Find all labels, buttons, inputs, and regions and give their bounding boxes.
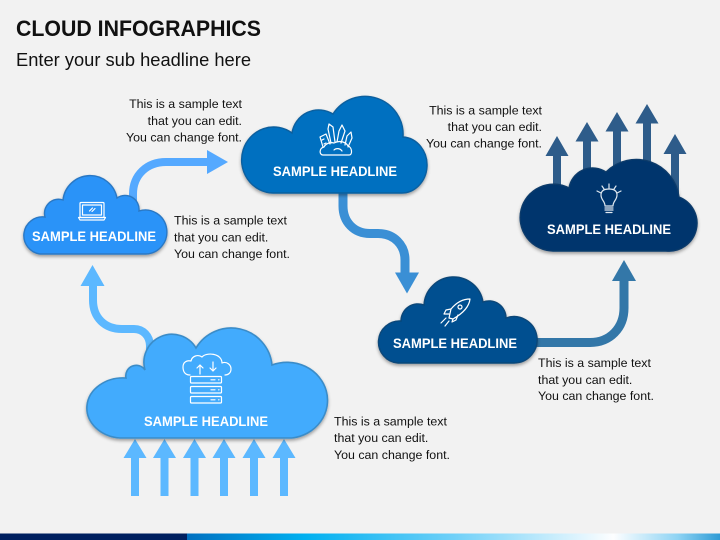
heading: SAMPLE HEADLINE bbox=[32, 228, 156, 244]
heading: SAMPLE HEADLINE bbox=[144, 413, 268, 429]
icon: rocket bbox=[441, 299, 470, 326]
text block: beside bottom cloud bbox=[334, 414, 450, 462]
text block: beside tools cloud: that you can edit. bbox=[448, 120, 542, 134]
text block: beside laptop cloud bbox=[174, 214, 290, 261]
arrow: rocket cloud to bulb cloud bbox=[530, 260, 636, 342]
panel: tools cloud bbox=[242, 96, 427, 193]
text block: above laptop cloud arrow: that you can edit. bbox=[148, 114, 242, 128]
text block: beside laptop cloud: This is a sample text bbox=[174, 214, 287, 228]
cloud shape bbox=[87, 328, 328, 438]
text block: below rocket cloud: You can change font. bbox=[538, 389, 654, 403]
icon: light bulb bbox=[597, 184, 621, 212]
heading: SAMPLE HEADLINE bbox=[393, 335, 517, 351]
arrow: bottom cloud to laptop cloud bbox=[80, 265, 150, 365]
text block: above laptop cloud arrow: This is a sample text bbox=[129, 97, 243, 111]
arrow: tools cloud to rocket cloud bbox=[343, 188, 419, 294]
text block: above laptop cloud arrow: You can change font. bbox=[126, 130, 242, 144]
text block: beside laptop cloud: You can change font. bbox=[174, 247, 290, 261]
cloud shape bbox=[242, 96, 427, 193]
title: CLOUD INFOGRAPHICS bbox=[16, 16, 261, 41]
cloud shape bbox=[378, 277, 537, 363]
text block: below rocket cloud: This is a sample text bbox=[538, 356, 651, 370]
text block: beside tools cloud bbox=[426, 104, 543, 150]
cloud shape bbox=[24, 176, 167, 254]
subtitle: Enter your sub headline here bbox=[16, 50, 251, 70]
text block: beside tools cloud: You can change font. bbox=[426, 136, 542, 150]
icon: cloud server bbox=[183, 354, 231, 403]
panel: rocket cloud bbox=[378, 277, 537, 363]
heading: SAMPLE HEADLINE bbox=[547, 221, 671, 237]
panel: laptop cloud bbox=[24, 176, 167, 254]
panel: bulb cloud bbox=[520, 159, 697, 251]
icon: brushes bbox=[320, 124, 352, 155]
panel: bottom cloud bbox=[87, 328, 328, 438]
arrow: laptop cloud to tools cloud bbox=[133, 150, 228, 206]
text block: beside laptop cloud: that you can edit. bbox=[174, 230, 268, 244]
text block: below rocket cloud: that you can edit. bbox=[538, 373, 632, 387]
text block: beside bottom cloud: that you can edit. bbox=[334, 431, 428, 445]
text block: beside bottom cloud: This is a sample text bbox=[334, 414, 447, 428]
footer bar bbox=[0, 534, 720, 540]
heading: SAMPLE HEADLINE bbox=[273, 163, 397, 179]
text block: beside tools cloud: This is a sample text bbox=[429, 104, 543, 118]
arrows: five outputs above bulb cloud bbox=[546, 104, 686, 204]
cloud shape bbox=[520, 159, 697, 251]
arrows: six inputs below bottom cloud bbox=[124, 439, 296, 496]
icon: laptop bbox=[78, 202, 106, 220]
text block: above laptop cloud arrow bbox=[126, 97, 243, 144]
text block: beside bottom cloud: You can change font. bbox=[334, 448, 450, 462]
text block: below rocket cloud bbox=[538, 356, 654, 403]
